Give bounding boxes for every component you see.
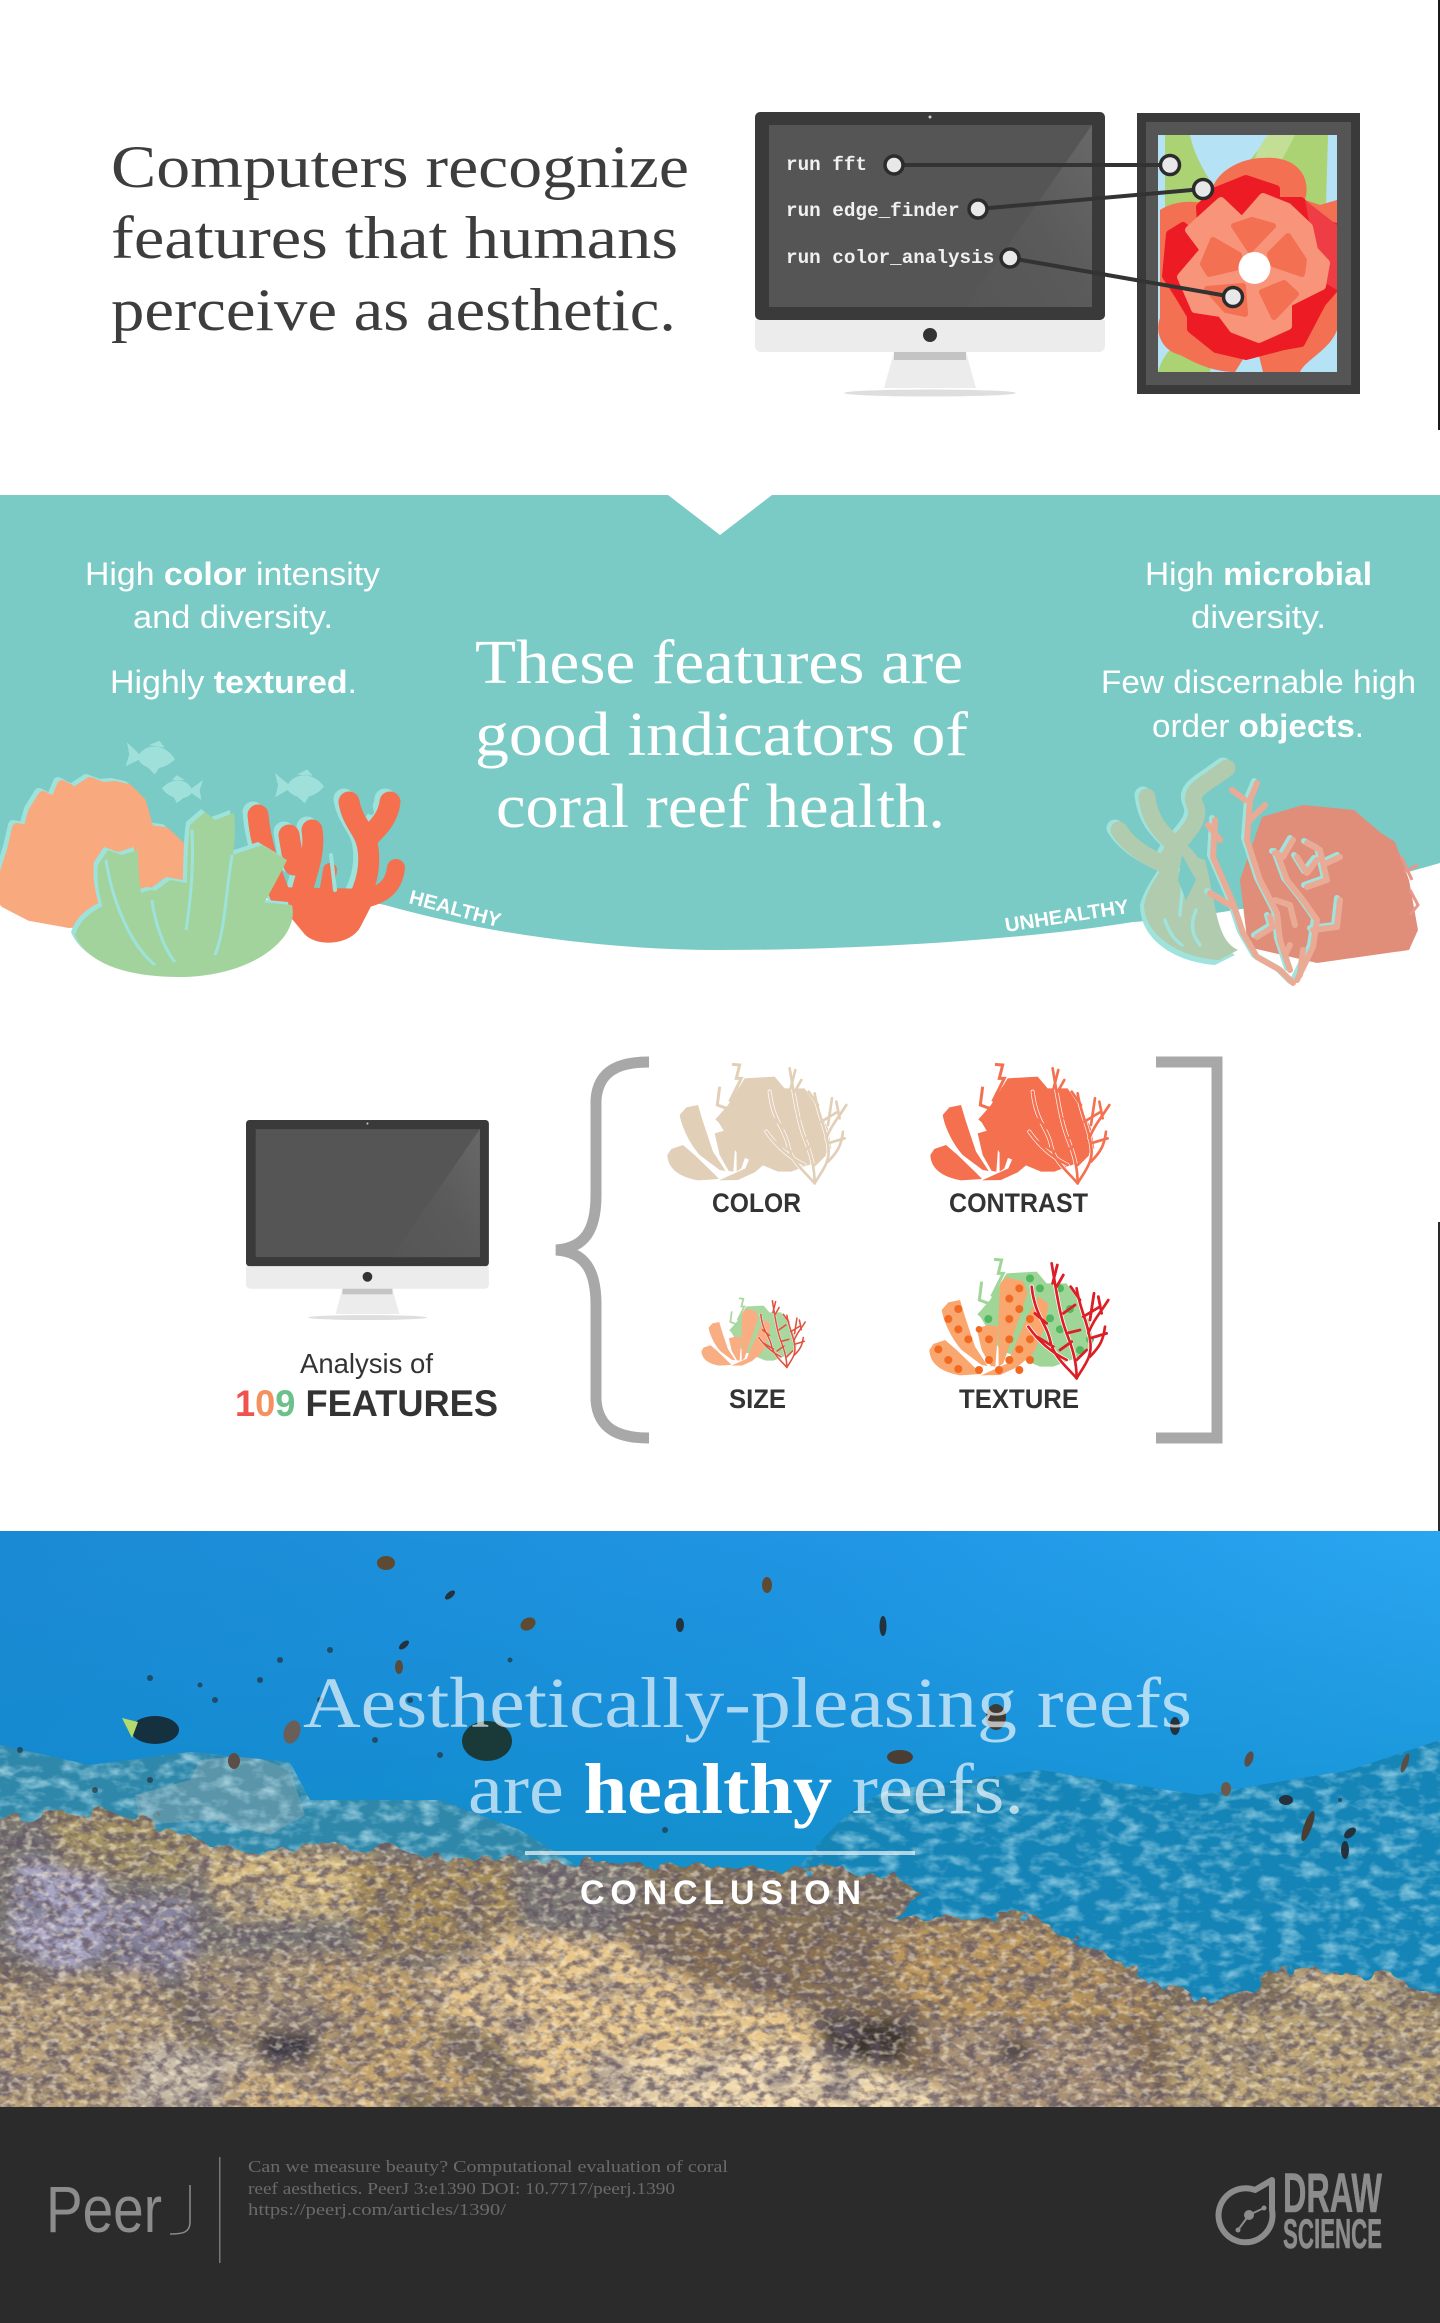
illustration: analysis monitor — [246, 1120, 489, 1320]
footer divider — [219, 2157, 220, 2263]
heading: features are good indicators: good indicators of — [475, 701, 968, 769]
citation text: https://peerj.com/articles/1390/ — [248, 2200, 506, 2219]
conclusion divider and label: CONCLUSION — [580, 1874, 861, 1912]
citation text: Can we measure beauty? Computational evaluation of coral — [248, 2157, 728, 2176]
panel: footer — [0, 2107, 1440, 2323]
feature: size: SIZE — [729, 1384, 786, 1414]
text block: analysis of 109 features: 109 FEATURES — [235, 1383, 498, 1424]
text block: analysis of 109 features: Analysis of — [300, 1348, 433, 1379]
text block: healthy coral traits: High color intensity — [85, 556, 380, 592]
citation text — [248, 2157, 728, 2219]
logo: Draw Science — [1219, 2161, 1382, 2257]
heading: features are good indicators: coral reef health. — [496, 773, 945, 841]
heading: features are good indicators — [475, 629, 968, 841]
illustration: computer monitor — [755, 112, 1105, 396]
left curly brace — [556, 1062, 649, 1438]
heading: computers recognize — [111, 134, 689, 343]
logo: PeerJ: Peer — [46, 2172, 162, 2246]
text block: healthy coral traits — [85, 556, 380, 700]
foreground coral masses — [0, 1806, 1440, 2107]
code commands on screen — [786, 154, 994, 269]
feature: color — [667, 1064, 846, 1218]
connector lines from commands to painting — [885, 156, 1242, 306]
text block: unhealthy coral traits: order objects. — [1152, 708, 1364, 744]
panel: teal coral health band — [0, 495, 1440, 950]
kelp coral — [1115, 766, 1238, 965]
conclusion divider and label — [525, 1851, 915, 1912]
photo panel: underwater coral reef — [0, 1531, 1440, 2125]
icon: fish — [123, 736, 325, 804]
green coral — [71, 809, 293, 977]
feature: size — [701, 1298, 805, 1414]
code commands on screen: run color_analysis — [786, 247, 994, 269]
code commands on screen: run edge_finder — [786, 200, 960, 222]
conclusion heading: are healthy reefs. — [468, 1749, 1024, 1829]
right bracket — [1156, 1062, 1217, 1438]
feature: contrast — [930, 1064, 1109, 1218]
orange coral — [1, 779, 184, 923]
text block: unhealthy coral traits: diversity. — [1191, 599, 1326, 635]
feature: texture — [929, 1259, 1108, 1414]
text block: analysis of 109 features — [235, 1348, 498, 1424]
feature: color: COLOR — [712, 1188, 801, 1218]
red coral — [253, 799, 396, 940]
illustration: unhealthy coral reef — [1003, 766, 1418, 983]
heading: features are good indicators: These features are — [475, 629, 963, 697]
feature: contrast: CONTRAST — [949, 1188, 1088, 1218]
feature: texture: TEXTURE — [959, 1384, 1079, 1414]
branching coral — [1207, 781, 1340, 983]
salmon rock coral — [1240, 805, 1418, 963]
text block: healthy coral traits: Highly textured. — [110, 664, 357, 700]
text block: unhealthy coral traits: High microbial — [1145, 556, 1372, 592]
heading: computers recognize: Computers recognize — [111, 134, 689, 200]
heading: computers recognize: features that humans — [111, 205, 678, 271]
illustration: framed flower painting — [1137, 113, 1360, 394]
text block: healthy coral traits: and diversity. — [133, 599, 333, 635]
fish — [17, 1556, 1411, 1859]
conclusion heading: Aesthetically-pleasing reefs — [303, 1663, 1192, 1743]
text block: unhealthy coral traits: Few discernable high — [1101, 664, 1416, 700]
text block: unhealthy coral traits — [1101, 556, 1416, 744]
label: healthy: HEALTHY — [407, 887, 504, 932]
citation text: reef aesthetics. PeerJ 3:e1390 DOI: 10.7717/peerj.1390 — [248, 2179, 675, 2198]
heading: computers recognize: perceive as aesthetic. — [111, 277, 676, 343]
label: unhealthy: UNHEALTHY — [1003, 896, 1131, 937]
conclusion heading — [303, 1663, 1192, 1829]
code commands on screen: run fft — [786, 154, 867, 176]
distant reef — [0, 1740, 1440, 2040]
illustration: healthy coral reef — [1, 736, 504, 977]
